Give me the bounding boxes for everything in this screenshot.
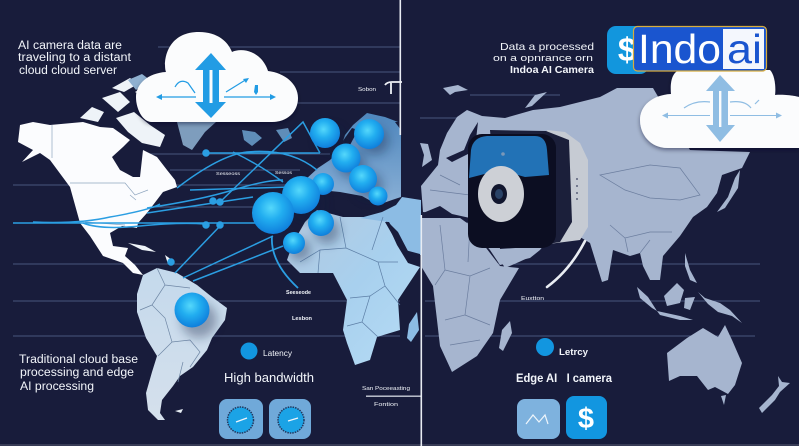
cloud: left: [136, 32, 298, 122]
icon: zigzag tile: [517, 399, 560, 439]
icon: small T marker: [385, 82, 402, 94]
heading: edge AI camera: Edge AI I camera: [516, 371, 612, 385]
icon: dollar tile: [566, 396, 607, 439]
text: edge caption: Data a processed: [500, 41, 594, 53]
small map labels: Seeseode: [286, 290, 311, 296]
camera dark band: [490, 130, 572, 249]
small map labels: Sessos: [275, 170, 293, 175]
text: edge caption: [493, 41, 594, 76]
icon: dollar tile: $: [578, 403, 594, 435]
text: edge caption: on a opnrance orn: [493, 53, 593, 63]
cloud: right: [640, 70, 799, 148]
camera body side: [533, 130, 588, 246]
text: processing caption: Traditional cloud base: [19, 354, 138, 366]
text: cloud caption: AI camera data are: [18, 40, 122, 52]
camera lens: [478, 166, 524, 222]
icon: gauge 2: [269, 399, 311, 439]
map: south america: [137, 268, 227, 420]
heading: high bandwidth: High bandwidth: [224, 370, 314, 385]
text: processing caption: AI processing: [20, 381, 94, 393]
small map labels: Euxtton: [521, 296, 544, 302]
legend: left latency: Latency: [263, 348, 293, 358]
text: processing caption: [19, 354, 138, 393]
legend: right latency: Letrcy: [559, 347, 588, 357]
legend: right latency: [536, 338, 588, 357]
camera cable: [547, 241, 585, 287]
text: processing caption: processing and edge: [20, 367, 134, 379]
icon: dollar tile behind logo: [607, 26, 649, 74]
map: africa, left panel: [287, 197, 421, 365]
camera indicator dots: [576, 178, 578, 200]
icon: dollar tile behind logo: $: [618, 31, 636, 68]
small map labels: Lesbon: [292, 316, 313, 322]
data spheres: [174, 118, 389, 338]
icon: double arrow in right cloud: [662, 75, 782, 142]
text: cloud caption: cloud cloud server: [19, 65, 117, 77]
network lines: [13, 122, 320, 288]
logo: Indo ai: [634, 26, 766, 72]
map: greenland and iceland: [177, 122, 292, 150]
legend: left latency: [240, 342, 293, 360]
map: eurasia, right panel: [420, 85, 750, 282]
map: africa, right panel: [421, 218, 535, 372]
small map labels: [216, 87, 544, 408]
map: europe, left panel: [305, 113, 401, 218]
icon: double arrow in left cloud: [156, 53, 276, 118]
small map labels: Fontion: [374, 402, 398, 408]
text: cloud caption: [18, 40, 132, 77]
map: australia and new zealand: [667, 325, 790, 413]
small map labels: Sesseoss: [216, 171, 241, 176]
icon: gauge 1: [219, 399, 263, 439]
text: edge caption: Indoa AI Camera: [510, 65, 594, 76]
logo: Indo ai: ai: [727, 26, 762, 72]
map: asia pacific islands: [637, 253, 742, 323]
small map labels: Sobon: [358, 87, 376, 93]
map: north america: [18, 74, 177, 275]
camera front face: [468, 134, 556, 248]
small map labels: San Poceeasting: [362, 386, 410, 392]
logo: Indo ai: Indo: [638, 26, 721, 72]
camera: [468, 130, 588, 287]
text: cloud caption: traveling to a distant: [18, 52, 132, 64]
